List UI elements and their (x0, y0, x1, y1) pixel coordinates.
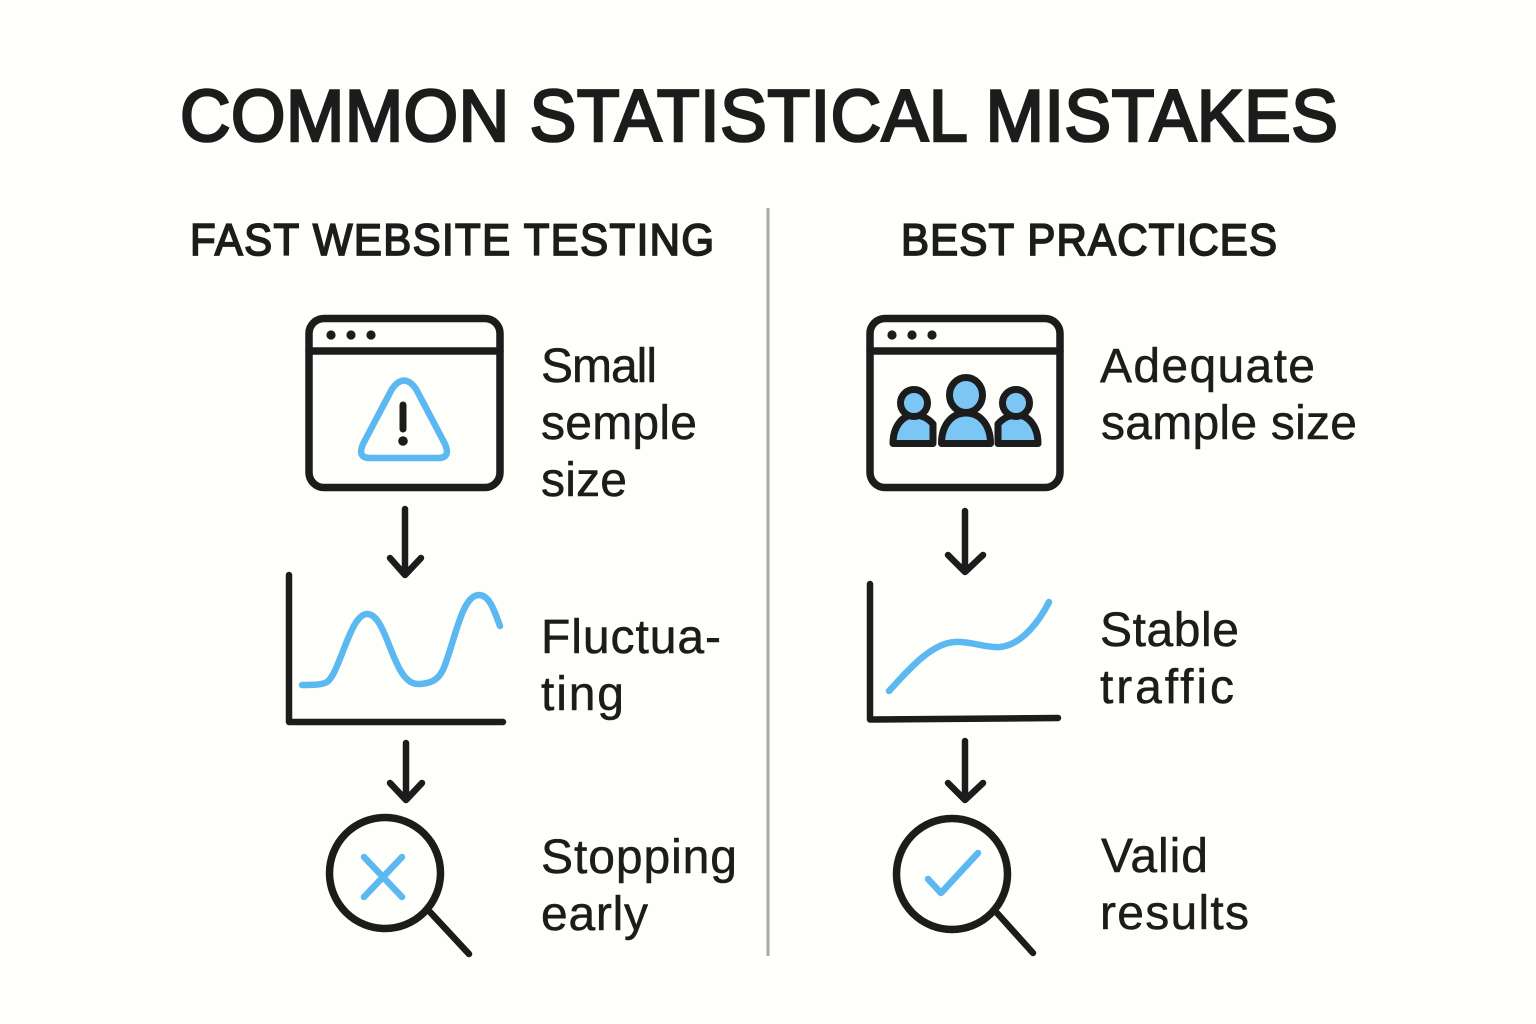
arrow: traffic to results (948, 741, 983, 800)
center divider (766, 208, 770, 956)
text: small semple size: Small (541, 340, 657, 393)
text: valid results (1100, 830, 1249, 940)
panel: fast website testing (190, 216, 737, 954)
text: stopping early: Stopping (541, 831, 737, 884)
text: valid results: results (1100, 887, 1249, 940)
text: small semple size (541, 340, 697, 507)
text: stable traffic: traffic (1100, 661, 1234, 714)
text: small semple size: semple (541, 397, 697, 450)
heading: fast website testing: FAST WEBSITE TESTING (190, 216, 714, 265)
text: adequate sample size (1100, 340, 1357, 450)
text: stopping early (541, 831, 737, 941)
text: fluctuating: Fluctua- (541, 611, 721, 664)
text: small semple size: size (541, 454, 627, 507)
text: stable traffic (1100, 604, 1239, 714)
chart: stable line (870, 584, 1058, 720)
text: adequate sample size: sample size (1101, 397, 1357, 450)
heading: best practices: BEST PRACTICES (901, 216, 1277, 265)
icon: browser window with people (870, 318, 1060, 488)
title: COMMON STATISTICAL MISTAKES (180, 75, 1338, 157)
panel: best practices (870, 216, 1357, 953)
arrow: fluctuating to stopping (390, 743, 422, 800)
text: stopping early: early (541, 888, 648, 941)
icon: magnifier with cross (330, 818, 469, 954)
arrow: warning to fluctuating (390, 509, 421, 575)
icon: magnifier with check (896, 818, 1033, 953)
text: valid results: Valid (1101, 830, 1208, 883)
text: adequate sample size: Adequate (1100, 340, 1315, 393)
arrow: sample to traffic (948, 511, 983, 572)
text: fluctuating: ting (541, 668, 624, 721)
text: stable traffic: Stable (1100, 604, 1239, 657)
text: fluctuating (541, 611, 721, 721)
chart: fluctuating line (289, 575, 503, 722)
icon: browser window with warning (309, 318, 500, 488)
